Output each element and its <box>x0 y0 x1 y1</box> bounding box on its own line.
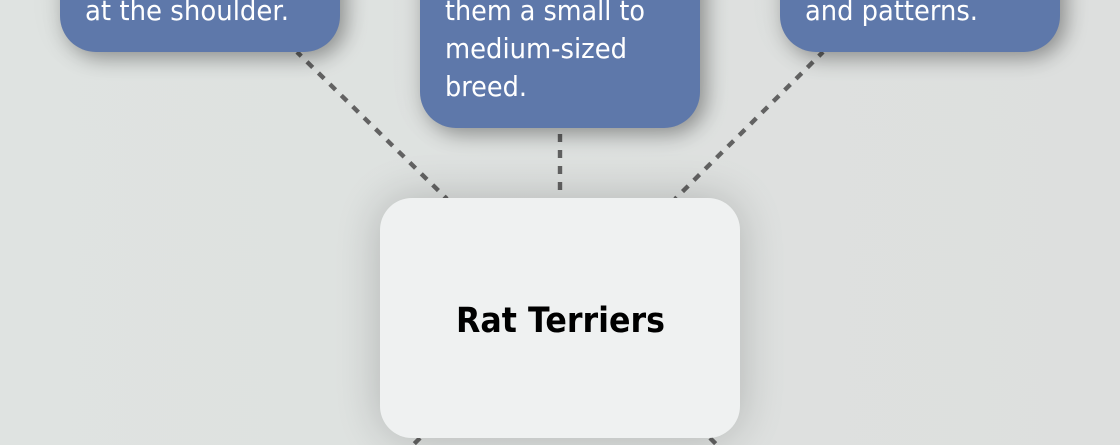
panel: right card <box>780 0 1060 52</box>
panel: left card <box>60 0 340 52</box>
middle card text <box>445 0 645 103</box>
panel: middle card <box>420 0 700 128</box>
middle card text: breed. <box>445 70 527 103</box>
title: Rat Terriers: Rat Terriers <box>456 301 665 341</box>
panel: central card <box>380 198 740 438</box>
middle card text: medium-sized <box>445 32 627 65</box>
